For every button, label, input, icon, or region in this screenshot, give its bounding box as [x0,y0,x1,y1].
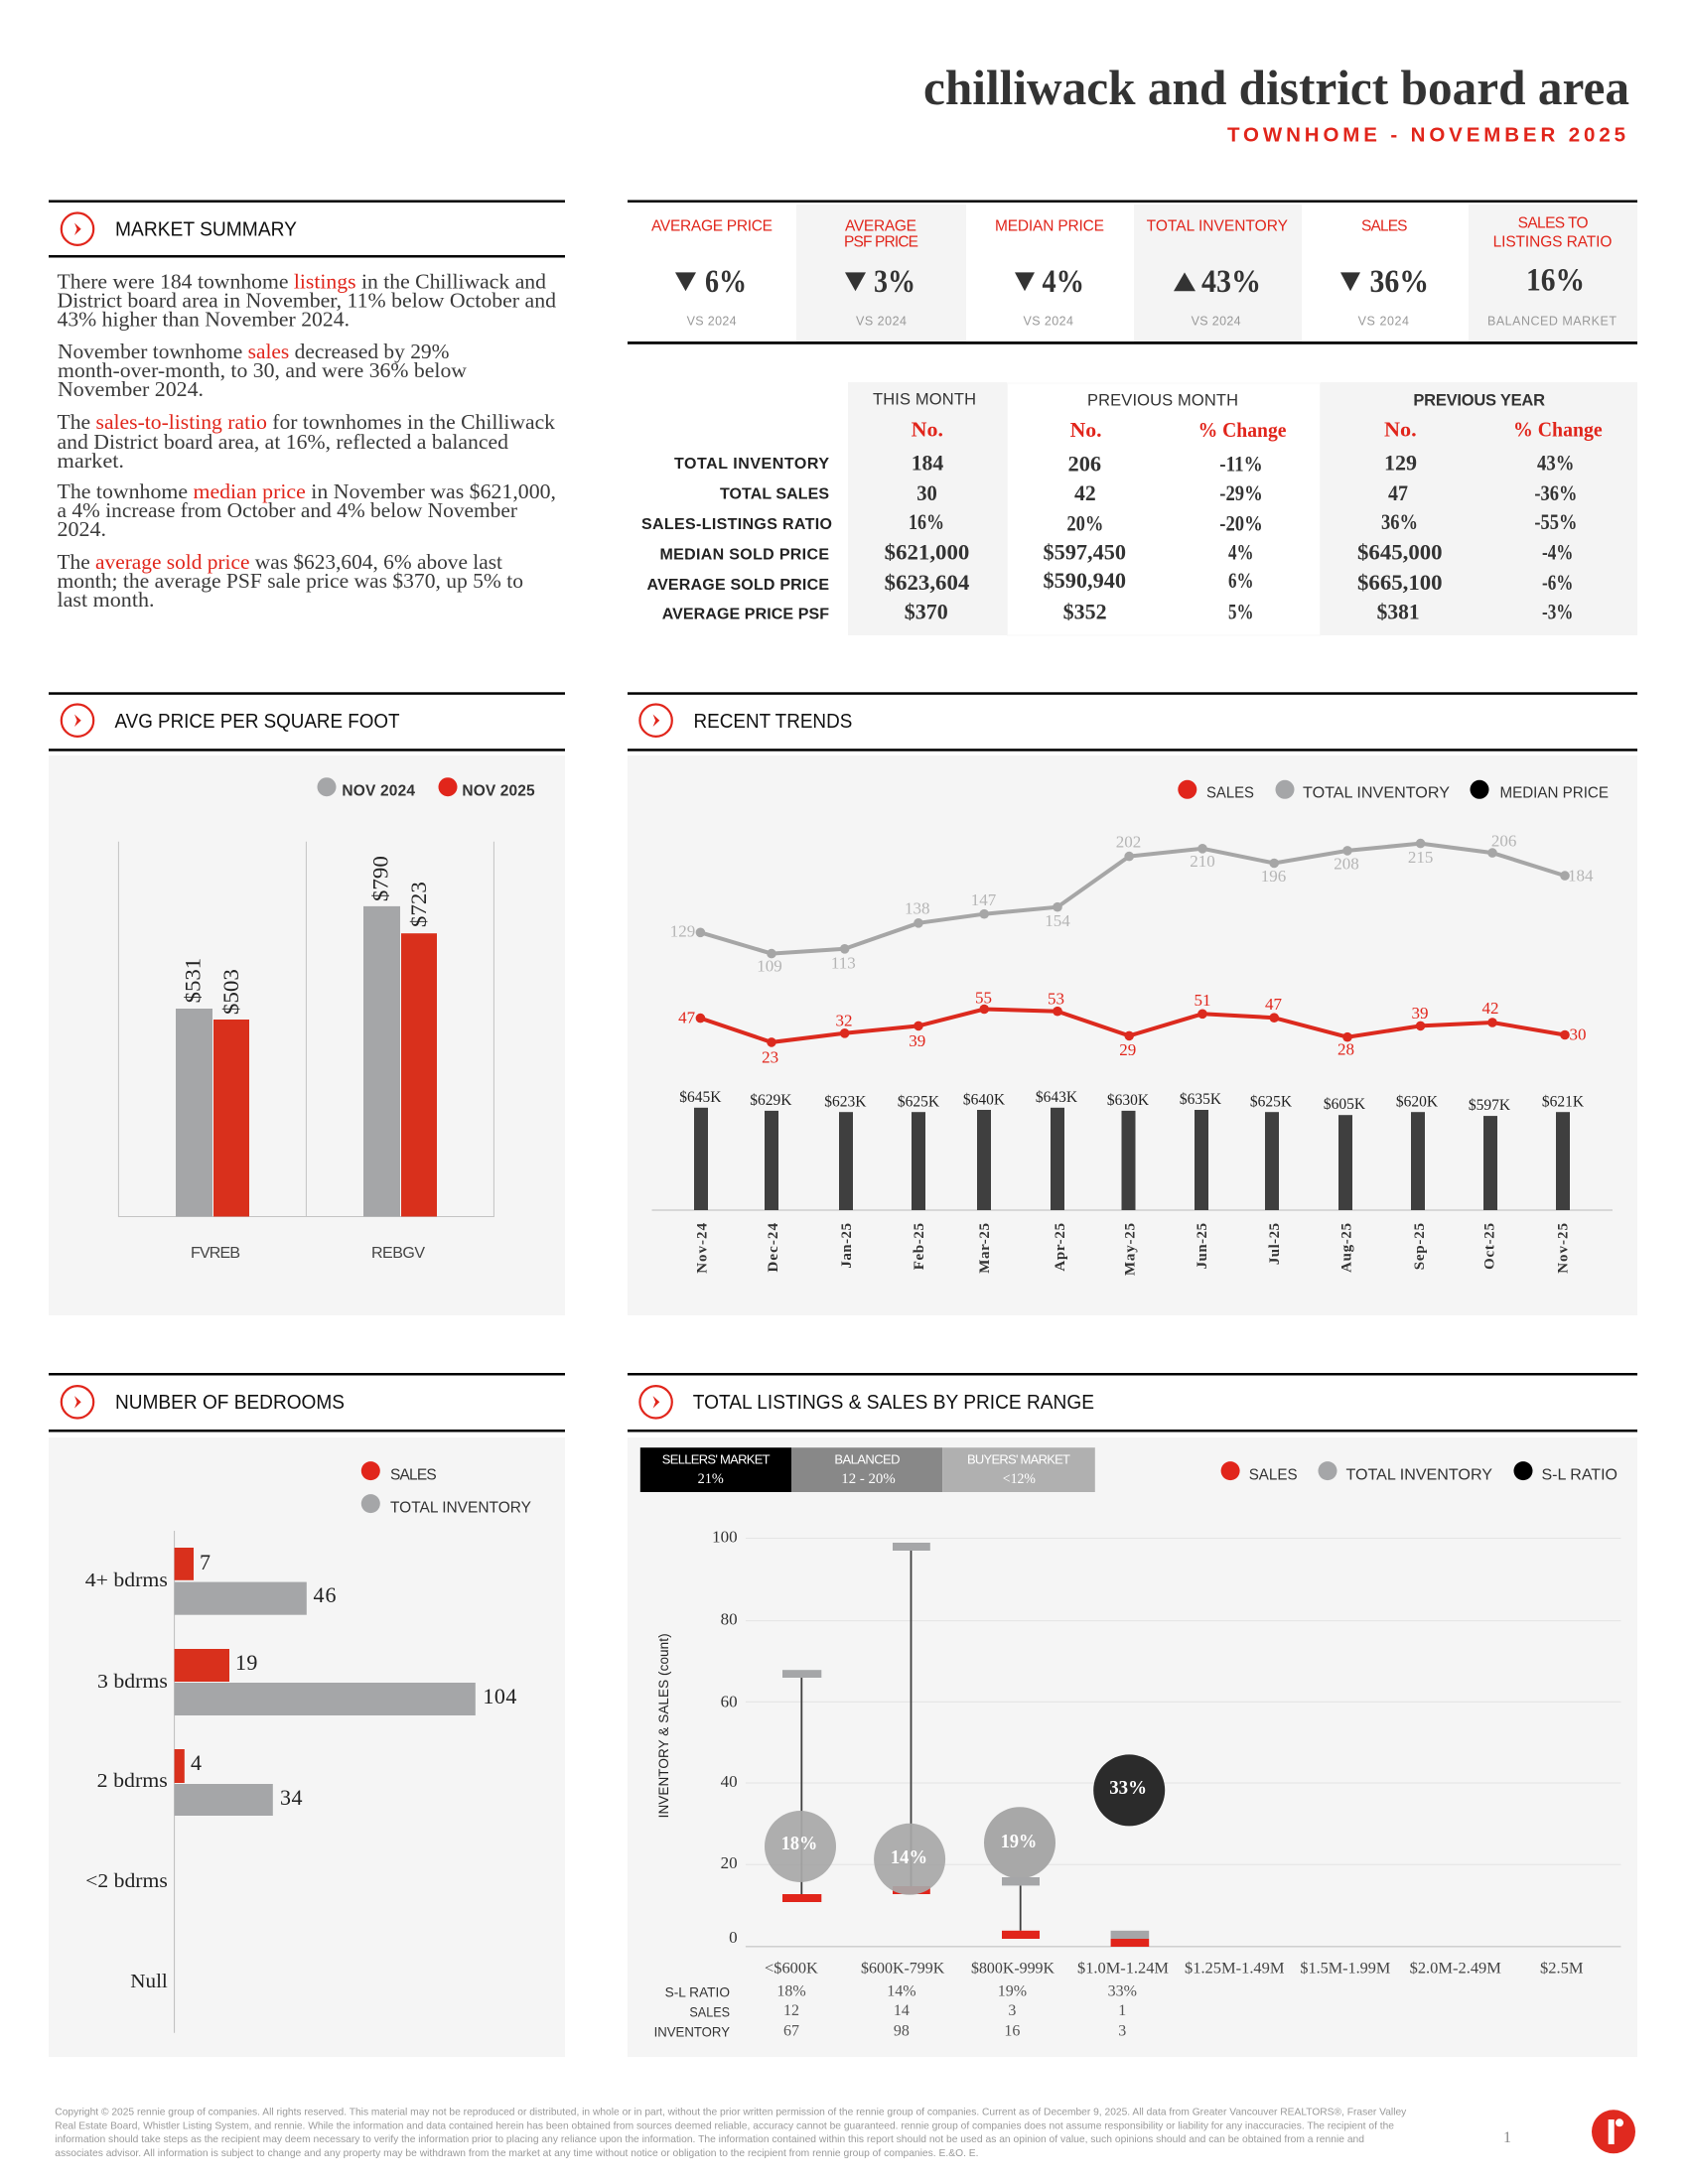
bar chart: bedrooms: <2 bdrms [85,1870,168,1892]
range: under 600K: 18% [781,1833,817,1854]
table column: this month: $623,604 [885,570,969,595]
table column: this month: $370 [905,599,948,623]
bar chart: bedrooms: 3 bdrms [97,1671,168,1693]
metric: average psf price: PSF PRICE [844,233,918,250]
table column: previous year: 129 [1384,451,1417,475]
bar chart: bedrooms: 19 [235,1650,257,1675]
line chart: total inventory: 184 [1568,866,1594,885]
range: 1.0M to 1.24M: 33% [1109,1777,1147,1799]
panel: number of bedrooms [49,1373,565,2057]
table column: this month: 16% [909,509,944,534]
bar chart: median price: Dec-24 [766,1223,781,1273]
x axis price labels: $2.5M [1540,1960,1583,1978]
table column: previous year: -3% [1542,599,1573,623]
metric: sales: 36% [1370,264,1429,300]
title: chilliwack and district board area [923,60,1629,115]
table column: previous month: PREVIOUS MONTH [1087,391,1238,409]
table column: this month [873,390,976,623]
page number: 1 [1503,2129,1511,2146]
chart: inventory and sales by price range: 80 [721,1609,738,1628]
x axis price labels: $800K-999K [971,1960,1055,1978]
line chart: total inventory: 206 [1491,832,1516,851]
bar chart: median price: May-25 [1123,1223,1139,1276]
text block: listings paragraph [58,269,557,331]
bar chart: median price: Jan-25 [839,1223,855,1269]
data rows: s-l ratio, sales, inventory: 3 [1118,2022,1126,2039]
table column: previous month: 6% [1228,568,1253,593]
x axis price labels: $1.0M-1.24M [1077,1960,1169,1978]
table column: previous year: $381 [1377,599,1420,623]
text block: median price paragraph: 2024. [58,517,106,541]
line chart: sales: 51 [1194,991,1211,1010]
data rows: s-l ratio, sales, inventory: 14 [894,2002,910,2019]
data rows: s-l ratio, sales, inventory: 67 [783,2022,799,2039]
bar chart: median price: $643K [1036,1089,1078,1106]
metric: total inventory [1147,217,1288,328]
line chart: total inventory: 109 [757,956,782,975]
table row labels: AVERAGE PRICE PSF [662,606,829,622]
data rows: s-l ratio, sales, inventory: 3 [1008,2002,1016,2019]
table row labels: SALES-LISTINGS RATIO [641,516,832,533]
table row labels [641,456,832,622]
bar chart: median price: $625K [898,1094,940,1110]
table column: previous month: 42 [1074,480,1096,505]
bar chart: bedrooms: Null [130,1971,168,1992]
footer disclaimer: information should take steps as the recipient may deem necessary to verify the information prior to placing any reliance upon the information. The information contained within this report should not be used as an opinion of value, such opinions should and can be obtained from a rennie and [55,2133,1364,2145]
bar chart: median price: $635K [1180,1091,1222,1108]
metric: median price: VS 2024 [1023,314,1073,328]
bar chart: median price: $597K [1469,1097,1511,1114]
line chart: sales: 32 [836,1011,852,1029]
text block: average sold price paragraph [58,550,523,612]
table column: previous month: 206 [1068,451,1101,476]
icon: avg price chevron [62,705,93,737]
bar chart: bedrooms: 34 [280,1785,302,1810]
line chart: sales: 42 [1481,999,1499,1018]
line chart: sales [678,988,1587,1066]
table row labels: TOTAL SALES [720,486,829,502]
table column: previous month: 5% [1228,599,1253,623]
bar chart: median price: Sep-25 [1412,1223,1428,1270]
legend: bedrooms: SALES [390,1466,437,1483]
metric: median price: MEDIAN PRICE [995,217,1104,234]
table column: this month: 184 [912,451,943,475]
table column: previous month: -11% [1219,451,1263,476]
table column: this month: 30 [916,480,937,505]
line chart: total inventory: 210 [1190,852,1215,871]
line chart: total inventory [670,832,1594,975]
text block: sales paragraph [58,340,468,401]
table column: previous month: $597,450 [1043,540,1126,565]
data rows: s-l ratio, sales, inventory: 98 [894,2022,910,2039]
text block: average sold price paragraph: last month. [58,588,155,612]
table column: previous year: No. [1384,417,1417,441]
metric: average price: 6% [705,264,747,300]
chart: inventory and sales by price range: 20 [721,1853,738,1872]
metric: total inventory: VS 2024 [1192,314,1241,328]
icon: market summary chevron [62,212,93,245]
data rows: s-l ratio, sales, inventory: 19% [998,1983,1027,1999]
bar chart: bedrooms: 4+ bdrms [85,1570,168,1591]
metric: median price: 4% [1043,264,1084,300]
text block: average sold price paragraph: month; the average PSF sale price was $370, up 5% to [58,569,523,593]
line chart: total inventory: 147 [971,890,997,909]
text block: listings paragraph: 43% higher than November 2024. [58,307,350,331]
range: 800K to 999K: 19% [1001,1831,1037,1852]
line chart: total inventory: 196 [1261,867,1286,886]
icon: price range chevron [639,1386,672,1419]
data rows: s-l ratio, sales, inventory: 14% [887,1983,916,1999]
market legend: sellers, balanced, buyers: <12% [1003,1471,1036,1487]
legend: years: NOV 2025 [462,782,535,799]
bar chart: price per square foot: $503 [218,969,243,1015]
text block: sales-to-listing paragraph [58,410,556,473]
table column: previous month: -20% [1219,510,1263,536]
table column: previous month: No. [1070,418,1102,442]
chart: inventory and sales by price range [654,1528,1620,2039]
bar chart: bedrooms [85,1531,516,2033]
bar chart: median price: Jun-25 [1195,1223,1210,1269]
line chart: sales: 39 [1412,1004,1428,1023]
line chart: sales: 47 [678,1008,696,1026]
metric: average price: AVERAGE PRICE [651,217,773,234]
text block: sales paragraph: month-over-month, to 30, and were 36% below [58,358,468,382]
table column: previous year: 43% [1537,451,1574,475]
bar chart: median price: $629K [750,1092,792,1109]
metric: sales to listings ratio: BALANCED MARKET [1487,314,1617,328]
table column: previous month [1043,391,1287,623]
x axis price labels [765,1960,1583,1978]
line chart: sales: 55 [975,988,992,1007]
bar chart: median price [651,1089,1613,1276]
table column: previous year: PREVIOUS YEAR [1413,391,1545,409]
bar chart: median price: Oct-25 [1481,1223,1497,1270]
text block: sales-to-listing paragraph: and District board area, at 16%, reflected a balanced [58,430,509,454]
legend: trends [1178,780,1609,802]
bar chart: price per square foot [118,842,493,1262]
x axis price labels: $1.5M-1.99M [1300,1960,1390,1978]
text block: median price paragraph [58,479,556,541]
legend: price range [1221,1461,1618,1483]
bar chart: bedrooms: 104 [483,1684,516,1708]
text block: average sold price paragraph: The average sold price was $623,604, 6% above last [58,550,502,574]
data rows: s-l ratio, sales, inventory [654,1983,1137,2039]
heading: recent trends: RECENT TRENDS [693,711,852,733]
bar chart: median price: Feb-25 [912,1223,927,1270]
range: 600K to 799K [874,1543,945,1895]
footer disclaimer: Real Estate Board, Whistler Listing System, and rennie. While the information and data contained herein has been obtained from sources deemed reliable, accuracy cannot be guaranteed. rennie group of companies does not assume responsibility or liability for any inaccuracies. The recipient of the [55,2120,1394,2132]
legend: price range: TOTAL INVENTORY [1346,1466,1492,1483]
range: 800K to 999K [984,1807,1055,1939]
bar chart: bedrooms: 4 [191,1750,202,1775]
line chart: sales: 53 [1048,990,1064,1009]
bar chart: bedrooms: 46 [314,1582,336,1607]
heading: market summary: MARKET SUMMARY [115,218,297,240]
bar chart: median price: $623K [824,1094,867,1110]
table column: previous year: $645,000 [1357,540,1443,565]
data rows: s-l ratio, sales, inventory: SALES [689,2004,730,2020]
bar chart: bedrooms: 2 bdrms [97,1770,168,1792]
bar chart: price per square foot: $531 [181,958,206,1003]
bar chart: median price: $621K [1542,1094,1585,1110]
text block: sales paragraph: November townhome sales decreased by 29% [58,340,449,363]
bar chart: median price: $630K [1107,1092,1150,1109]
table column: previous month: 20% [1066,510,1103,536]
panel: recent trends [628,692,1637,1315]
icon: bedrooms chevron [62,1386,93,1419]
metric: sales to listings ratio: LISTINGS RATIO [1493,233,1612,250]
market legend: sellers, balanced, buyers: BUYERS' MARKET [967,1452,1070,1467]
chart: inventory and sales by price range: 100 [712,1528,738,1547]
legend: trends: TOTAL INVENTORY [1303,785,1450,802]
heading: number of bedrooms: NUMBER OF BEDROOMS [115,1392,345,1414]
chart: inventory and sales by price range: 60 [721,1692,738,1710]
text block: sales-to-listing paragraph: The sales-to-listing ratio for townhomes in the Chilliwack [58,410,556,434]
data rows: s-l ratio, sales, inventory: S-L RATIO [665,1983,730,1999]
legend: trends: SALES [1206,785,1254,802]
table row labels: MEDIAN SOLD PRICE [659,547,829,564]
range: 600K to 799K: 14% [891,1846,927,1868]
x axis price labels: $2.0M-2.49M [1410,1960,1501,1978]
bar chart: price per square foot: FVREB [191,1245,240,1262]
data rows: s-l ratio, sales, inventory: INVENTORY [654,2023,731,2039]
bar chart: median price: Nov-25 [1556,1223,1572,1274]
data rows: s-l ratio, sales, inventory: 12 [783,2002,799,2019]
market legend: sellers, balanced, buyers: 12 - 20% [841,1471,896,1487]
panel: total listings and sales by price range [628,1373,1637,2057]
metric: average psf price: AVERAGE [845,217,916,234]
market legend: sellers, balanced, buyers: SELLERS' MARKET [662,1452,771,1467]
heading: avg price per square foot: AVG PRICE PER SQUARE FOOT [115,711,399,733]
panel: market summary [49,201,565,612]
bar chart: median price: Nov-24 [695,1223,711,1274]
line chart: sales: 47 [1265,995,1283,1014]
data rows: s-l ratio, sales, inventory: 1 [1118,2002,1126,2019]
bar chart: median price: $625K [1250,1094,1293,1110]
line chart: sales: 28 [1337,1040,1354,1058]
bar chart: price per square foot: $790 [368,856,393,901]
table column: previous year: $665,100 [1357,570,1443,595]
line chart: total inventory: 138 [905,899,929,918]
metric: sales to listings ratio: SALES TO [1518,214,1589,231]
bar chart: median price: $620K [1396,1094,1439,1110]
market legend: sellers, balanced, buyers: 21% [698,1471,724,1487]
table column: previous month: % Change [1198,418,1287,442]
market legend: sellers, balanced, buyers: BALANCED [834,1452,900,1467]
x axis price labels: $600K-799K [861,1960,945,1978]
line chart: total inventory: 113 [831,954,856,973]
metric: sales [1340,217,1429,328]
chart: inventory and sales by price range: 40 [721,1772,738,1791]
x axis price labels: $1.25M-1.49M [1185,1960,1285,1978]
bar chart: price per square foot: REBGV [371,1245,425,1262]
table column: this month: No. [912,417,943,441]
bar chart: median price: Apr-25 [1053,1223,1068,1272]
line chart: total inventory: 129 [670,922,695,941]
footer disclaimer: associates advisor. All information is subject to change and any property may be withdrawn from the market at any time without notice or obligation to the recipient from rennie group of companies. E.&O. E. [55,2147,979,2159]
metric: sales: SALES [1361,217,1408,234]
bar chart: median price: $605K [1324,1096,1366,1113]
chart: inventory and sales by price range: 0 [729,1928,738,1947]
line chart: total inventory: 208 [1334,855,1359,874]
table row labels: AVERAGE SOLD PRICE [647,577,829,594]
metric: average price: VS 2024 [687,314,737,328]
table column: previous year [1357,391,1603,623]
metric: average psf price: VS 2024 [856,314,907,328]
table column: this month: THIS MONTH [873,390,976,408]
metric: total inventory: TOTAL INVENTORY [1147,217,1288,234]
metric: sales: VS 2024 [1358,314,1409,328]
text block: sales paragraph: November 2024. [58,377,204,401]
table column: previous year: -36% [1534,480,1577,505]
bar chart: price per square foot: $723 [406,882,431,927]
line chart: total inventory: 154 [1045,911,1070,930]
line chart: sales: 23 [762,1047,778,1066]
table column: previous year: -55% [1534,509,1577,534]
metric: median price [995,217,1104,328]
table column: previous year: -4% [1542,540,1573,565]
metric: total inventory: 43% [1201,264,1261,300]
legend: bedrooms [361,1461,531,1516]
table row labels: TOTAL INVENTORY [674,456,829,473]
table column: previous month: 4% [1228,540,1253,565]
footer disclaimer: Copyright © 2025 rennie group of companies. All rights reserved. This material may not be reproduced or distributed, in whole or in part, without the prior written permission of the rennie group of companies. Current as of December 9, 2025. All data from Greater Vancouver REALTORS®, Fraser Valley [55,2107,1407,2118]
heading: total listings and sales by price range: TOTAL LISTINGS & SALES BY PRICE RANGE [693,1392,1094,1414]
market legend: sellers, balanced, buyers [640,1447,1095,1492]
bar chart: median price: Aug-25 [1338,1223,1354,1273]
table column: previous month: -29% [1219,480,1263,505]
legend: years: NOV 2024 [342,782,415,799]
panel: avg price per square foot [49,692,565,1315]
footer disclaimer [55,2107,1407,2159]
icon: rennie logo [1592,2110,1635,2153]
text block: median price paragraph: The townhome median price in November was $621,000, [58,479,556,503]
legend: bedrooms: TOTAL INVENTORY [390,1499,531,1516]
range: under 600K [765,1670,836,1902]
metric: average psf price: 3% [874,264,915,300]
data rows: s-l ratio, sales, inventory: 33% [1108,1983,1137,1999]
line chart: sales: 29 [1119,1040,1136,1059]
text block: sales-to-listing paragraph: market. [58,449,124,473]
panel: comparison table [641,382,1637,635]
metric: average psf price [844,217,918,328]
metric: sales to listings ratio [1487,214,1617,328]
table column: previous year: % Change [1513,417,1603,441]
legend: years [318,777,535,799]
x axis price labels: <$600K [765,1960,818,1978]
text block: listings paragraph: There were 184 townhome listings in the Chilliwack and [58,269,547,293]
legend: price range: S-L RATIO [1541,1466,1618,1483]
legend: price range: SALES [1249,1466,1298,1483]
icon: recent trends chevron [639,705,672,737]
panel: key metrics strip [628,201,1637,344]
table column: this month: $621,000 [885,540,969,565]
line chart: total inventory: 202 [1116,832,1141,852]
metric: average price [651,217,773,328]
data rows: s-l ratio, sales, inventory: 16 [1004,2022,1020,2039]
metric: sales to listings ratio: 16% [1526,262,1585,298]
table column: previous year: -6% [1542,570,1573,595]
chart: inventory and sales by price range: INVENTORY & SALES (count) [656,1633,671,1818]
subtitle: TOWNHOME - NOVEMBER 2025 [1227,123,1625,146]
line chart: total inventory: 215 [1408,848,1433,867]
table column: previous month: $352 [1063,599,1107,623]
bar chart: bedrooms: 7 [200,1550,211,1574]
text block: listings paragraph: District board area in November, 11% below October and [58,288,557,312]
bar chart: median price: Mar-25 [977,1223,993,1274]
range: 1.0M to 1.24M [1093,1754,1165,1947]
data rows: s-l ratio, sales, inventory: 18% [776,1983,806,1999]
line chart: sales: 30 [1569,1024,1587,1043]
bar chart: median price: $645K [679,1089,722,1106]
table column: previous year: 47 [1388,480,1408,505]
bar chart: median price: $640K [963,1091,1006,1108]
legend: trends: MEDIAN PRICE [1499,785,1609,802]
table column: previous year: 36% [1381,509,1418,534]
bar chart: median price: Jul-25 [1267,1223,1283,1265]
line chart: sales: 39 [909,1031,925,1050]
table column: previous month: $590,940 [1043,568,1126,593]
text block: median price paragraph: a 4% increase from October and 4% below November [58,498,517,522]
